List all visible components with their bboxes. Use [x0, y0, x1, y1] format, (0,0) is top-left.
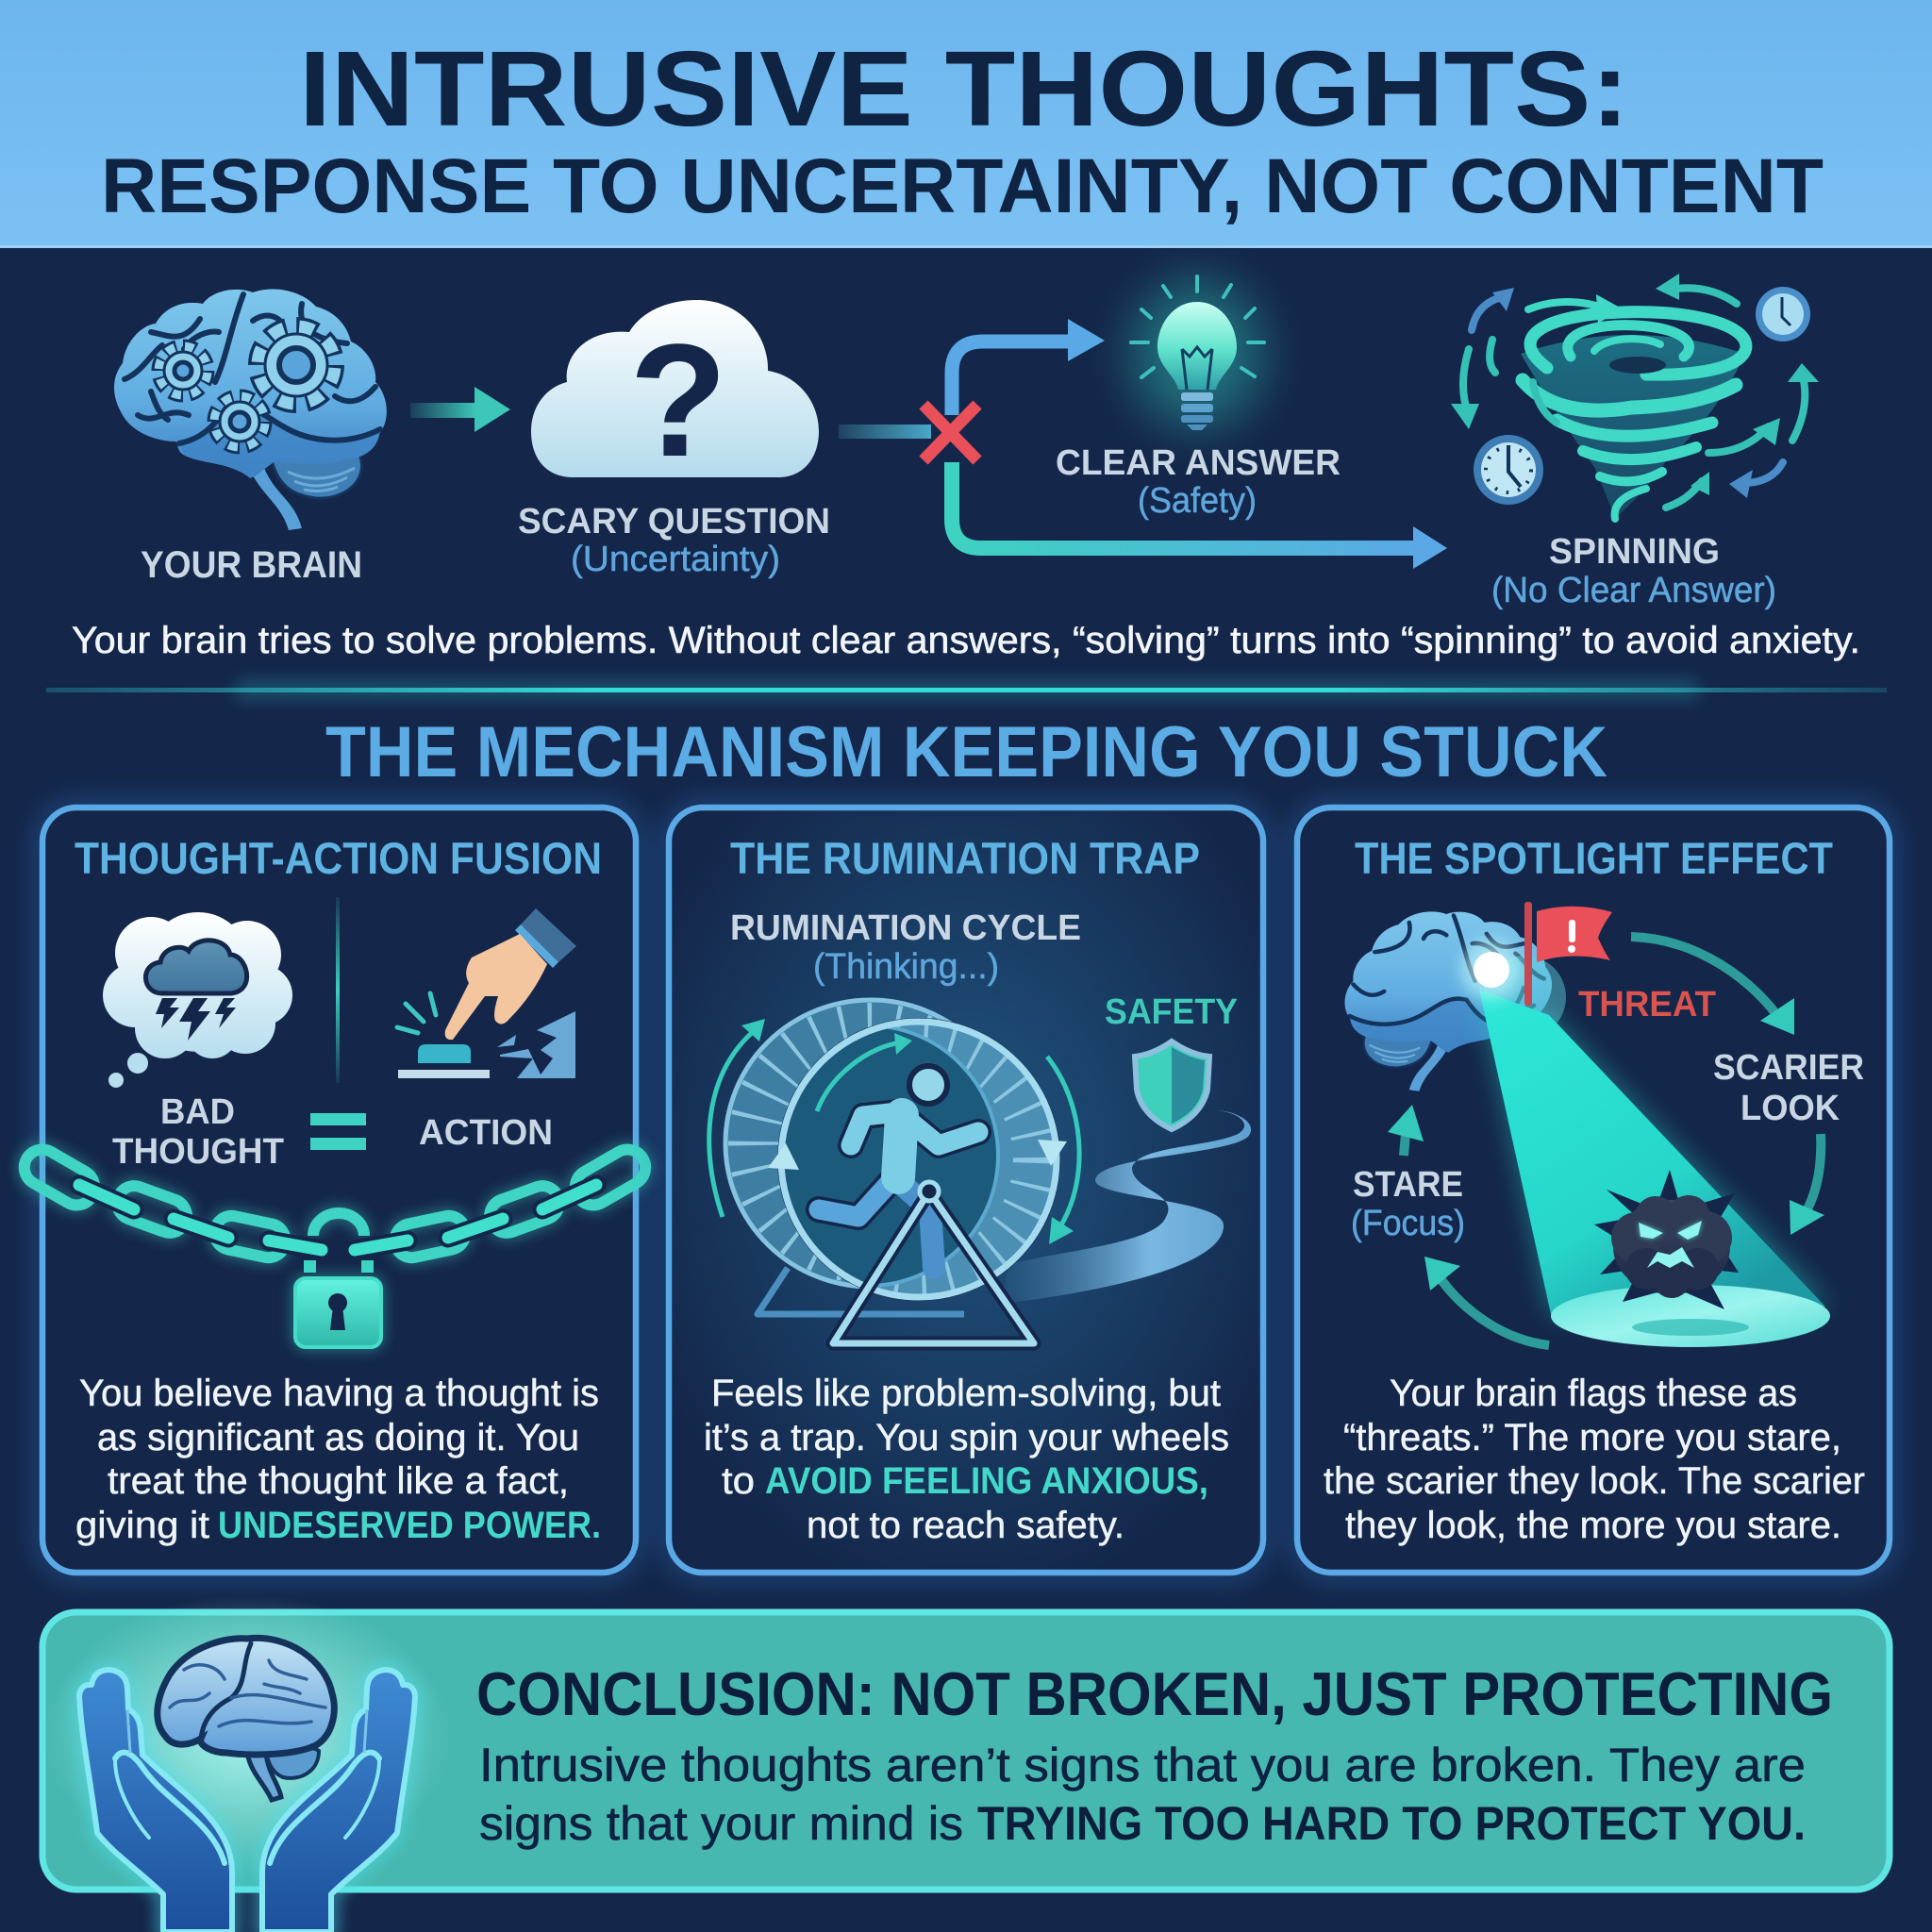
label: bad thought: BAD: [160, 1092, 235, 1132]
label: your brain: YOUR BRAIN: [141, 544, 362, 586]
label: clear answer: (Safety): [1138, 481, 1257, 521]
panel: conclusion: [42, 1594, 1890, 1932]
panel: the rumination trap: [669, 808, 1263, 1573]
icon: tornado with clocks: [1451, 274, 1819, 519]
label: scarier look: LOOK: [1740, 1089, 1840, 1128]
chain and padlock: [18, 1143, 652, 1349]
panel title: THOUGHT-ACTION FUSION: [75, 833, 602, 883]
conclusion text: Intrusive thoughts aren’t signs that you are broken. They are: [479, 1739, 1806, 1791]
label: stare: [1351, 1165, 1465, 1243]
panel body text: UNDESERVED POWER.: [218, 1505, 601, 1546]
label: bad thought: THOUGHT: [112, 1132, 284, 1172]
conclusion text: [479, 1739, 1806, 1850]
conclusion text: signs that your mind is: [479, 1797, 963, 1850]
label: spinning: SPINNING: [1549, 532, 1720, 572]
arrow: brain to question: [410, 387, 510, 432]
label: spinning: [1491, 532, 1776, 610]
spotlight beam: [1461, 940, 1830, 1347]
label: spinning: (No Clear Answer): [1491, 571, 1776, 610]
label: scary question: SCARY QUESTION: [518, 502, 830, 541]
label: scary question: (Uncertainty): [571, 540, 780, 579]
icon: cloud with question mark: ?: [629, 311, 727, 491]
label: scary question: [518, 502, 830, 579]
panel: thought-action fusion: [18, 808, 652, 1573]
panel body text: treat the thought like a fact,: [108, 1460, 569, 1502]
panel body text: to: [722, 1460, 755, 1502]
panel body text: “threats.” The more you stare,: [1343, 1417, 1841, 1458]
panel body text: Feels like problem-solving, but: [711, 1373, 1221, 1414]
label: clear answer: CLEAR ANSWER: [1056, 443, 1341, 483]
conclusion text: TRYING TOO HARD TO PROTECT YOU.: [977, 1797, 1806, 1850]
icon: cloud with question mark: [531, 300, 819, 491]
panel body text: AVOID FEELING ANXIOUS,: [765, 1460, 1208, 1502]
panel body text: Your brain flags these as: [1390, 1373, 1797, 1414]
label: rumination cycle: [730, 908, 1081, 987]
panel body text: [75, 1373, 601, 1546]
header band: [0, 0, 1932, 248]
label: bad thought: [112, 1092, 284, 1172]
panel body text: as significant as doing it. You: [97, 1417, 579, 1458]
conclusion heading: CONCLUSION: NOT BROKEN, JUST PROTECTING: [476, 1659, 1833, 1728]
label: scarier look: [1713, 1048, 1864, 1128]
section heading: THE MECHANISM KEEPING YOU STUCK: [325, 712, 1607, 792]
icon: light bulb: [1131, 276, 1264, 430]
summary sentence: Your brain tries to solve problems. Without clear answers, “solving” turns into “spinning” to avoid anxiety.: [72, 620, 1860, 661]
label: safety: SAFETY: [1105, 992, 1238, 1032]
panel body text: giving it: [75, 1505, 209, 1546]
icon: hamster wheel with runner: [709, 1000, 1079, 1343]
equals sign: [310, 1113, 366, 1150]
road to safety: [1000, 1110, 1251, 1304]
icon: brain with gears: [114, 289, 387, 530]
label: rumination cycle: RUMINATION CYCLE: [730, 908, 1081, 948]
cycle arrows: [1388, 937, 1824, 1345]
icon: hand pressing button: [397, 908, 576, 1078]
label: scarier look: SCARIER: [1713, 1048, 1864, 1088]
subtitle: RESPONSE TO UNCERTAINTY, NOT CONTENT: [101, 143, 1824, 229]
panel body text: the scarier they look. The scarier: [1324, 1460, 1865, 1502]
icon: shield: [1135, 1041, 1209, 1129]
icon: thought cloud with storm: [103, 912, 292, 1088]
arrow: blocked path to clear answer: [952, 319, 1105, 415]
panel: the spotlight effect: [1297, 808, 1890, 1573]
panel title: THE RUMINATION TRAP: [730, 833, 1200, 883]
icon: red flag: [1524, 902, 1612, 1006]
panel body text: [1324, 1373, 1865, 1546]
arrow: path to spinning: [952, 462, 1447, 569]
panel body text: it’s a trap. You spin your wheels: [704, 1417, 1229, 1458]
label: stare: STARE: [1353, 1165, 1463, 1205]
icon: red cross: [924, 405, 977, 460]
title: INTRUSIVE THOUGHTS:: [299, 29, 1629, 148]
label: threat: THREAT: [1578, 985, 1716, 1024]
label: action: ACTION: [419, 1113, 553, 1153]
panel title: THE SPOTLIGHT EFFECT: [1355, 833, 1833, 883]
panel body text: [704, 1373, 1229, 1546]
icon: hands holding brain: [44, 1594, 450, 1932]
arrow: connector out of the cloud: [839, 425, 931, 439]
label: clear answer: [1056, 443, 1341, 521]
icon: spiky monster: [1594, 1170, 1739, 1309]
label: stare: (Focus): [1351, 1204, 1465, 1243]
panel body text: not to reach safety.: [807, 1505, 1124, 1546]
icon: brain: [1344, 911, 1552, 1091]
label: rumination cycle: (Thinking...): [813, 947, 999, 987]
panel body text: they look, the more you stare.: [1345, 1505, 1841, 1546]
panel body text: You believe having a thought is: [79, 1373, 599, 1414]
